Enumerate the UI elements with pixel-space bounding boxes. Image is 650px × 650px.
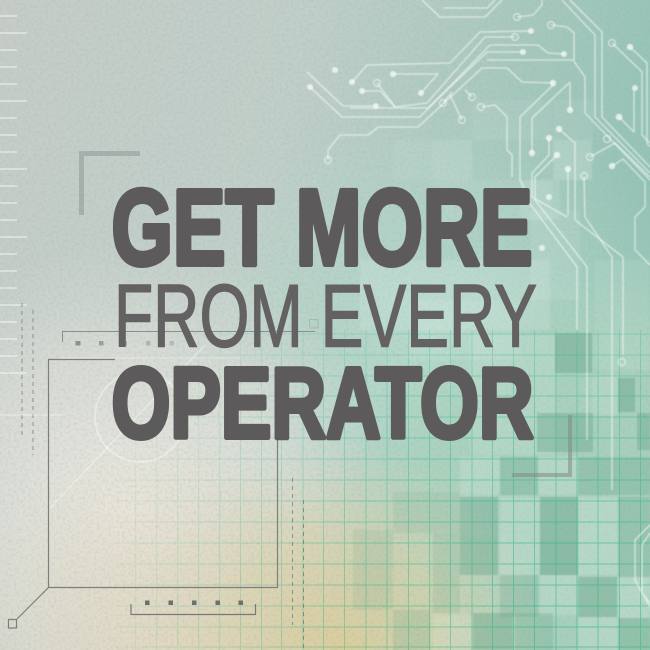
wireframe panel with connector: [8, 360, 278, 628]
pixel squares: pale upper mosaic: [360, 100, 650, 650]
corner bracket, bottom right of title: [512, 415, 572, 477]
pale crosshair circle and sweep line: [0, 345, 205, 510]
measurement grid: [115, 330, 650, 650]
circuit board traces: [307, 0, 650, 607]
dashed vertical guides: [22, 303, 304, 650]
ruler ticks, left edge: [0, 16, 27, 373]
lower dotted bracket: [131, 600, 256, 614]
circuit nodes: [307, 14, 638, 365]
title: [112, 166, 537, 460]
upper dotted bracket: [60, 320, 318, 358]
pixel squares: dark green mosaic: [353, 333, 650, 650]
corner bracket, top left of title: [79, 151, 140, 215]
